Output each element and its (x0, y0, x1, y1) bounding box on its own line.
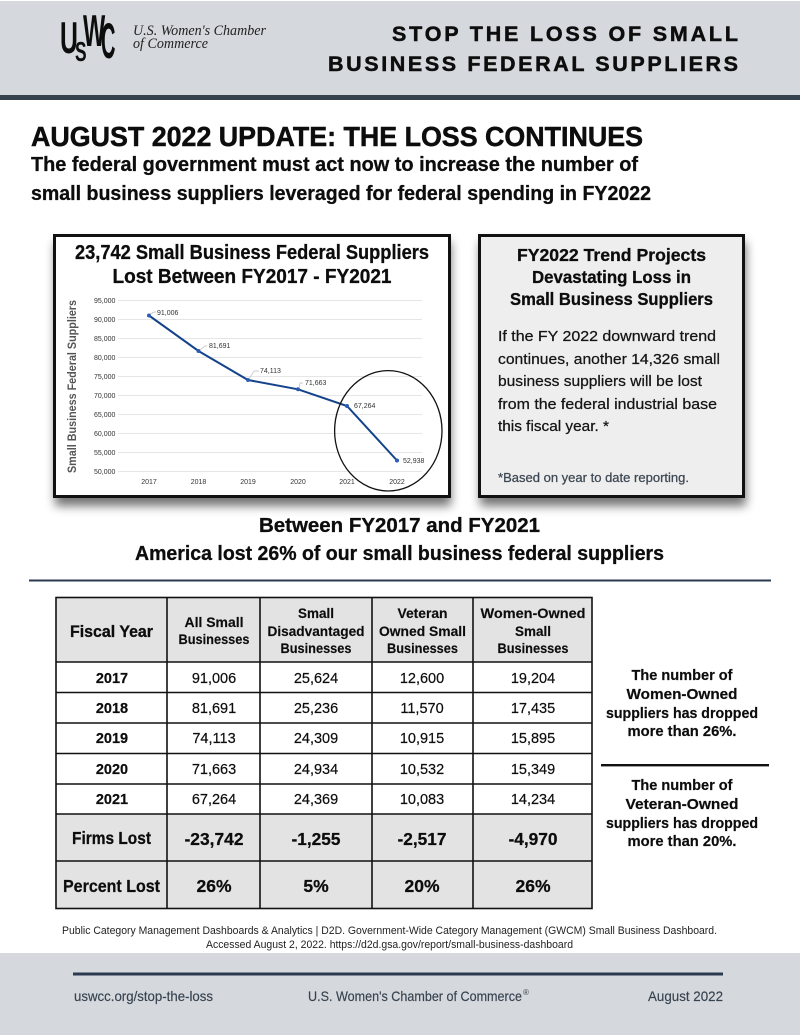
trend heading: Devastating Loss in (532, 267, 691, 287)
row 2019: 2019 (96, 731, 128, 747)
table header row: Small (298, 605, 334, 621)
x axis labels: 2019 (240, 479, 256, 486)
trend body: this fiscal year. * (498, 418, 609, 435)
trend body: If the FY 2022 downward trend (498, 328, 716, 345)
trend heading: Small Business Suppliers (510, 289, 713, 309)
data table (56, 597, 592, 909)
callout: women-owned: suppliers has dropped (606, 705, 758, 722)
row 2021 (96, 792, 555, 808)
chart heading: Lost Between FY2017 - FY2021 (112, 266, 392, 288)
table header row: Businesses (498, 640, 569, 656)
callout: women-owned: The number of (632, 667, 733, 684)
source citation: Public Category Management Dashboards & Analytics | D2D. Government-Wide Category Management (GWCM) Small Business Dashboard. (62, 925, 717, 937)
chart heading: 23,742 Small Business Federal Suppliers (75, 242, 429, 264)
trend heading: FY2022 Trend Projects (517, 245, 706, 265)
table header row: Businesses (280, 640, 352, 656)
data line (147, 314, 399, 462)
x axis labels: 2020 (290, 479, 306, 486)
y axis title: Small Business Federal Suppliers (65, 300, 79, 473)
subheading (31, 153, 651, 205)
trend body: from the federal industrial base (498, 396, 717, 413)
summary statement: Between FY2017 and FY2021 (259, 515, 540, 537)
trend body (498, 328, 720, 435)
row percent lost: 5% (303, 876, 329, 896)
table header row (70, 605, 586, 656)
table header row: Businesses (178, 631, 250, 647)
subheading: small business suppliers leveraged for federal spending in FY2022 (31, 182, 651, 205)
row percent lost (63, 876, 551, 896)
data labels: 81,691 (209, 343, 231, 350)
callout: veteran-owned: suppliers has dropped (606, 815, 758, 832)
x axis labels (141, 479, 405, 486)
row percent lost: 26% (515, 876, 551, 896)
footer band (0, 953, 800, 1035)
callout: women-owned (606, 667, 758, 740)
row percent lost: 26% (196, 876, 232, 896)
header band (0, 1, 800, 100)
table header row: Owned Small (379, 623, 466, 639)
row 2018 (96, 701, 555, 717)
data labels (150, 310, 425, 465)
y axis labels: 55,000 (94, 450, 116, 457)
logo wordmark: U.S. Women's Chamber (133, 23, 266, 39)
callout: veteran-owned: The number of (632, 777, 733, 794)
y axis labels: 70,000 (94, 393, 116, 400)
y axis labels: 65,000 (94, 412, 116, 419)
row 2018: 17,435 (511, 701, 555, 717)
callout: women-owned: more than 26%. (628, 723, 736, 740)
panel: FY2022 trend (480, 236, 746, 506)
row 2021: 14,234 (511, 792, 555, 808)
trend body: business suppliers will be lost (498, 373, 703, 390)
header title: STOP THE LOSS OF SMALL (392, 22, 738, 46)
header title: BUSINESS FEDERAL SUPPLIERS (328, 52, 738, 76)
table header row: Fiscal Year (70, 622, 153, 641)
row 2017: 25,624 (294, 671, 338, 687)
row firms lost: -2,517 (398, 829, 446, 849)
row 2018: 81,691 (192, 701, 236, 717)
row firms lost: -1,255 (292, 829, 341, 849)
row firms lost: -4,970 (508, 829, 558, 849)
row 2021: 24,369 (294, 792, 338, 808)
callout: veteran-owned: more than 20%. (628, 833, 736, 850)
panel: line chart (54, 236, 451, 506)
row firms lost: -23,742 (184, 829, 244, 849)
logo monogram: C (101, 15, 115, 70)
row 2021: 67,264 (192, 792, 236, 808)
callout: women-owned: Women-Owned (626, 686, 738, 703)
row 2017: 12,600 (400, 671, 444, 687)
source citation (62, 925, 717, 951)
row 2020: 2020 (96, 762, 128, 778)
x axis labels: 2017 (141, 479, 157, 486)
row 2019: 24,309 (294, 731, 338, 747)
data labels: 91,006 (157, 310, 179, 317)
row 2020: 10,532 (400, 762, 444, 778)
gridlines (118, 300, 422, 472)
y axis labels: 90,000 (94, 317, 116, 324)
logo wordmark (133, 23, 266, 52)
source citation: Accessed August 2, 2022. https://d2d.gsa.gov/report/small-business-dashboard (206, 939, 573, 951)
data labels: 71,663 (305, 380, 327, 387)
x axis labels: 2018 (191, 479, 206, 486)
footer registered mark: ® (523, 988, 529, 997)
logo monogram: U (60, 12, 78, 63)
row firms lost (72, 828, 558, 849)
summary statement (135, 515, 664, 565)
row 2020: 15,349 (511, 762, 555, 778)
y axis labels: 95,000 (94, 298, 116, 305)
header title (328, 22, 738, 76)
row 2021: 10,083 (400, 792, 444, 808)
row 2019: 15,895 (511, 731, 555, 747)
table header row: Veteran (398, 605, 448, 621)
row 2020 (96, 762, 555, 778)
row 2019: 10,915 (400, 731, 444, 747)
row 2018: 11,570 (400, 701, 444, 717)
row 2017: 91,006 (192, 671, 236, 687)
row firms lost: Firms Lost (72, 828, 151, 848)
row 2021: 2021 (96, 792, 128, 808)
y axis labels: 85,000 (94, 336, 116, 343)
row percent lost: 20% (404, 876, 440, 896)
row 2020: 71,663 (192, 762, 236, 778)
table header row: Businesses (387, 640, 458, 656)
table header row: Women-Owned (480, 605, 586, 621)
data labels: 74,113 (260, 368, 281, 375)
logo monogram: W (83, 6, 105, 56)
row 2018: 2018 (96, 701, 128, 717)
row 2020: 24,934 (294, 762, 338, 778)
callout: veteran-owned: Veteran-Owned (626, 796, 738, 813)
y axis labels: 50,000 (94, 469, 116, 476)
y axis labels: 60,000 (94, 431, 116, 438)
data labels: 67,264 (354, 403, 376, 410)
summary statement: America lost 26% of our small business federal suppliers (135, 543, 664, 565)
table grid (56, 597, 592, 909)
footer url: uswcc.org/stop-the-loss (74, 988, 213, 1004)
trend heading (510, 245, 713, 309)
x axis labels: 2021 (339, 479, 355, 486)
row 2019 (96, 731, 555, 747)
row percent lost: Percent Lost (63, 876, 160, 896)
table header row: Small (515, 623, 551, 639)
table header row: All Small (184, 614, 244, 630)
subheading: The federal government must act now to increase the number of (31, 153, 638, 176)
logo monogram: S (75, 36, 87, 67)
footer organisation: U.S. Women's Chamber of Commerce (308, 988, 522, 1004)
trend footnote: *Based on year to date reporting. (498, 470, 689, 485)
x axis labels: 2022 (389, 479, 405, 486)
main heading: AUGUST 2022 UPDATE: THE LOSS CONTINUES (31, 121, 643, 152)
footer date: August 2022 (648, 988, 723, 1004)
logo wordmark: of Commerce (133, 36, 209, 52)
row 2017: 2017 (96, 671, 128, 687)
y axis labels (94, 298, 116, 476)
logo monogram (60, 6, 115, 70)
y axis labels: 80,000 (94, 355, 116, 362)
data labels: 52,938 (403, 458, 425, 465)
row 2018: 25,236 (294, 701, 338, 717)
row 2017 (96, 671, 555, 687)
row 2017: 19,204 (511, 671, 555, 687)
row 2019: 74,113 (192, 731, 236, 747)
logo (60, 6, 266, 70)
trend body: continues, another 14,326 small (498, 351, 720, 368)
y axis labels: 75,000 (94, 374, 116, 381)
table shading (56, 597, 592, 909)
callout: veteran-owned (606, 777, 758, 850)
chart heading (75, 242, 429, 288)
table header row: Disadvantaged (268, 623, 364, 639)
callout circle (335, 371, 442, 491)
